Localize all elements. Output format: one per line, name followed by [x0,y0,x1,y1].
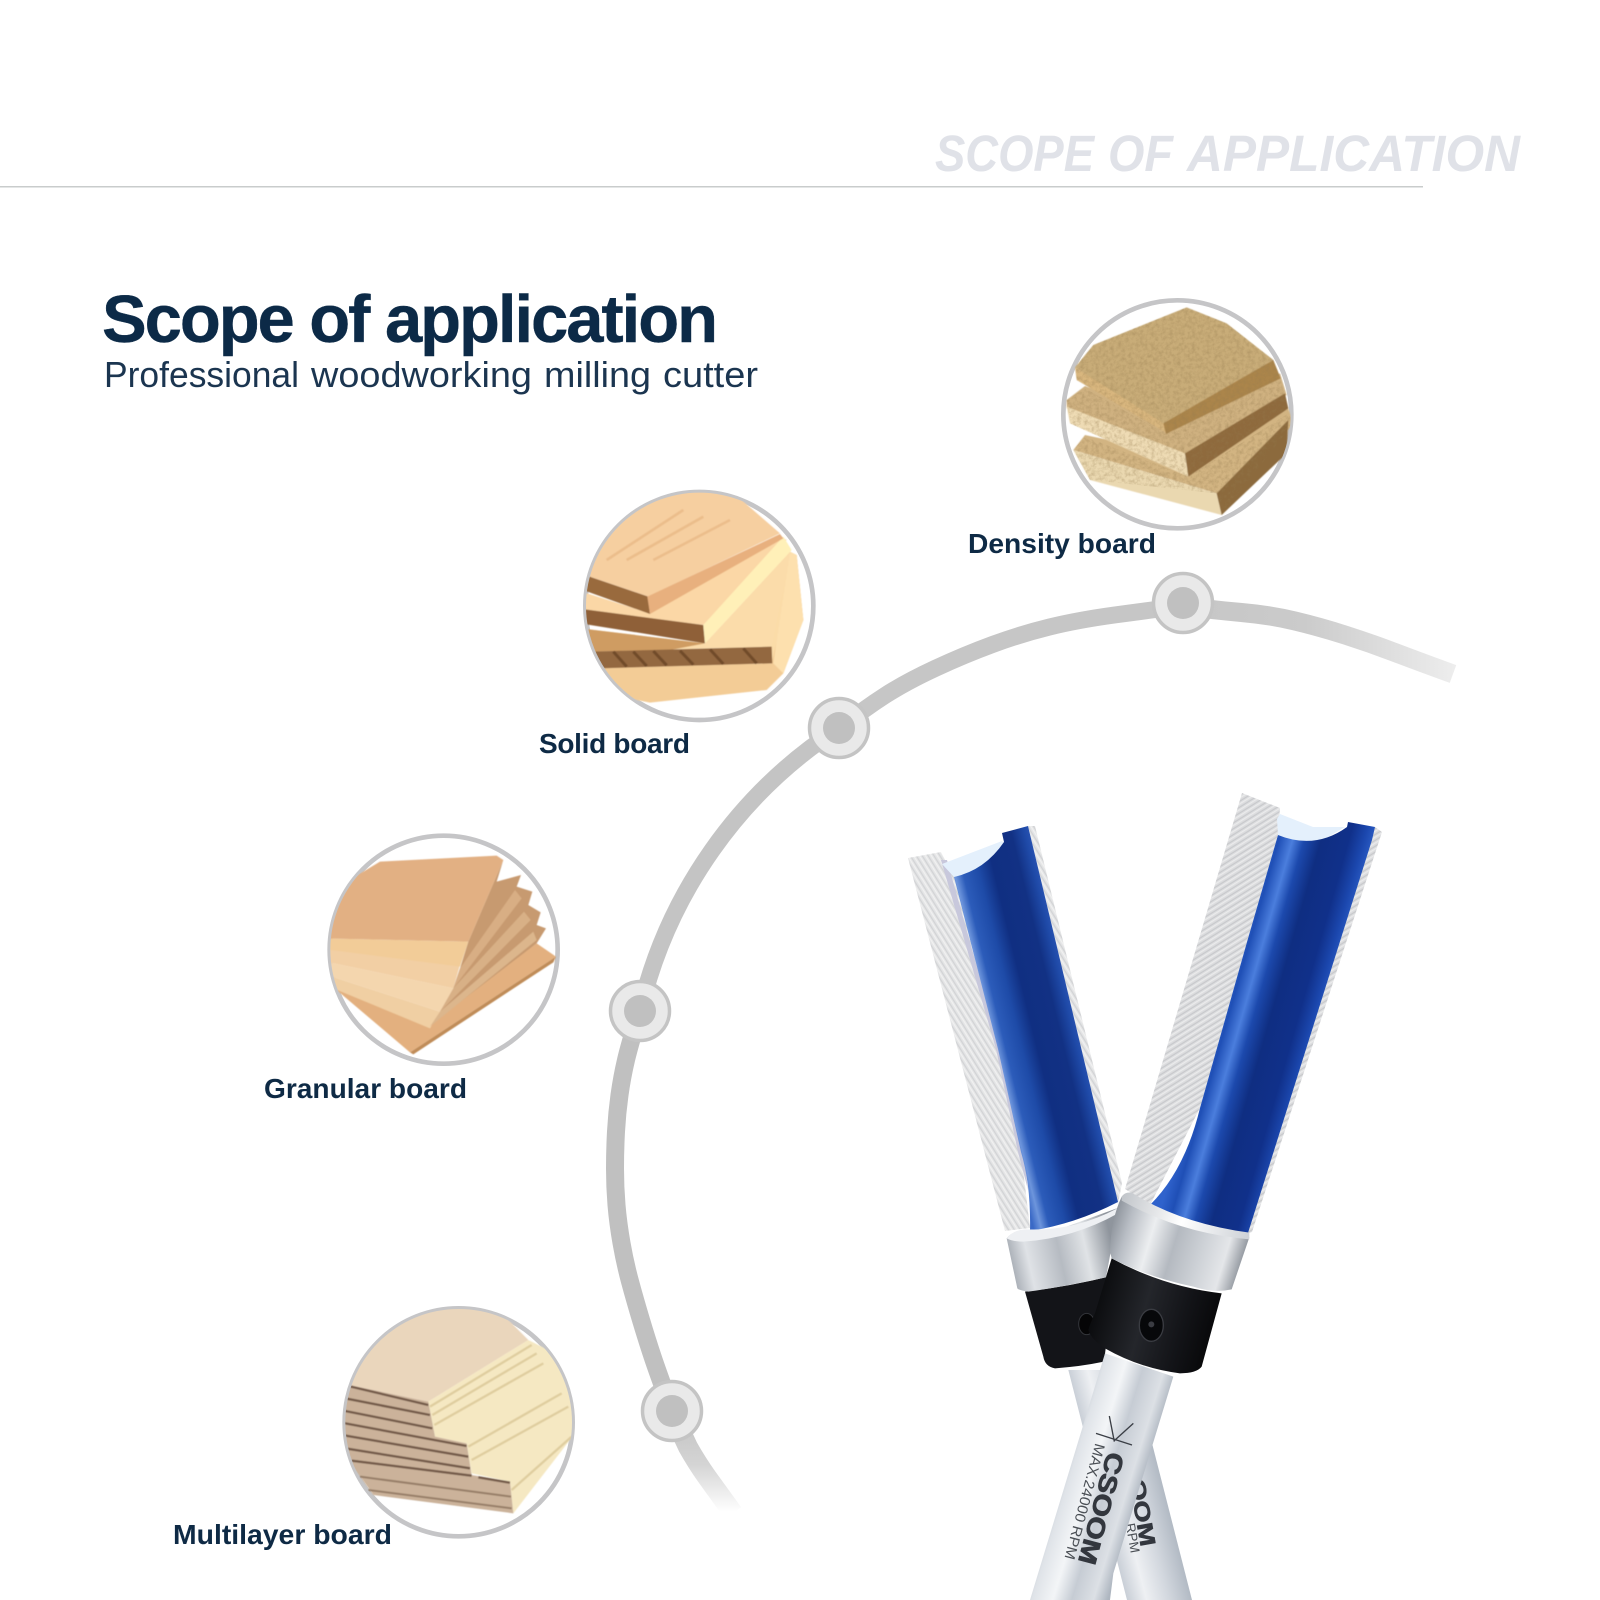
label: density board: Density board [968,528,1156,559]
shank speed text: MAX.24000 RPM [1061,1442,1107,1561]
back black lock collar [1025,1275,1115,1368]
back shank with logo: OOM [1124,1477,1161,1548]
node: granular board [610,982,670,1040]
back shank with logo [1068,1370,1192,1600]
header: section banner title: SCOPE [935,125,1096,182]
header: section banner title: OF [1108,125,1175,182]
subtitle: professional woodworking milling cutter [104,354,758,395]
router bits illustration [908,793,1382,1600]
back bearing [1007,1208,1118,1292]
title: scope of application: Scope of application [102,282,718,357]
shank brand text: CSOOM [1072,1449,1129,1567]
subtitle: professional woodworking milling cutter: woodworking [310,354,532,395]
header: section banner title [935,125,1521,182]
front black lock collar [1088,1258,1222,1373]
icon: solid board photo circle [577,487,813,720]
node: multilayer board [642,1382,702,1440]
label: granular board: Granular board [264,1073,467,1104]
label: solid board: Solid board [539,728,690,759]
node: density board [1154,574,1212,632]
subtitle: professional woodworking milling cutter: Professional [104,354,299,395]
icon: density board photo circle [1060,300,1297,530]
subtitle: professional woodworking milling cutter: cutter [663,354,758,395]
front shank [1030,1353,1173,1600]
icon: granular board photo circle [323,836,558,1064]
header: section banner title: APPLICATION [1185,125,1521,182]
front bearing [1110,1192,1249,1291]
right router bit cutter head [1125,793,1382,1236]
label: multilayer board: Multilayer board [173,1519,392,1550]
node: solid board [810,698,868,758]
back shank with logo: RPM [1123,1522,1143,1554]
subtitle: professional woodworking milling cutter: milling [544,354,651,395]
left router bit cutter head [908,826,1122,1231]
logo mark [1096,1416,1133,1445]
curved timeline arc with nodes [610,574,1453,1513]
icon: multilayer board photo circle [340,1303,578,1536]
shanks, bearings and collars [1007,1192,1249,1600]
